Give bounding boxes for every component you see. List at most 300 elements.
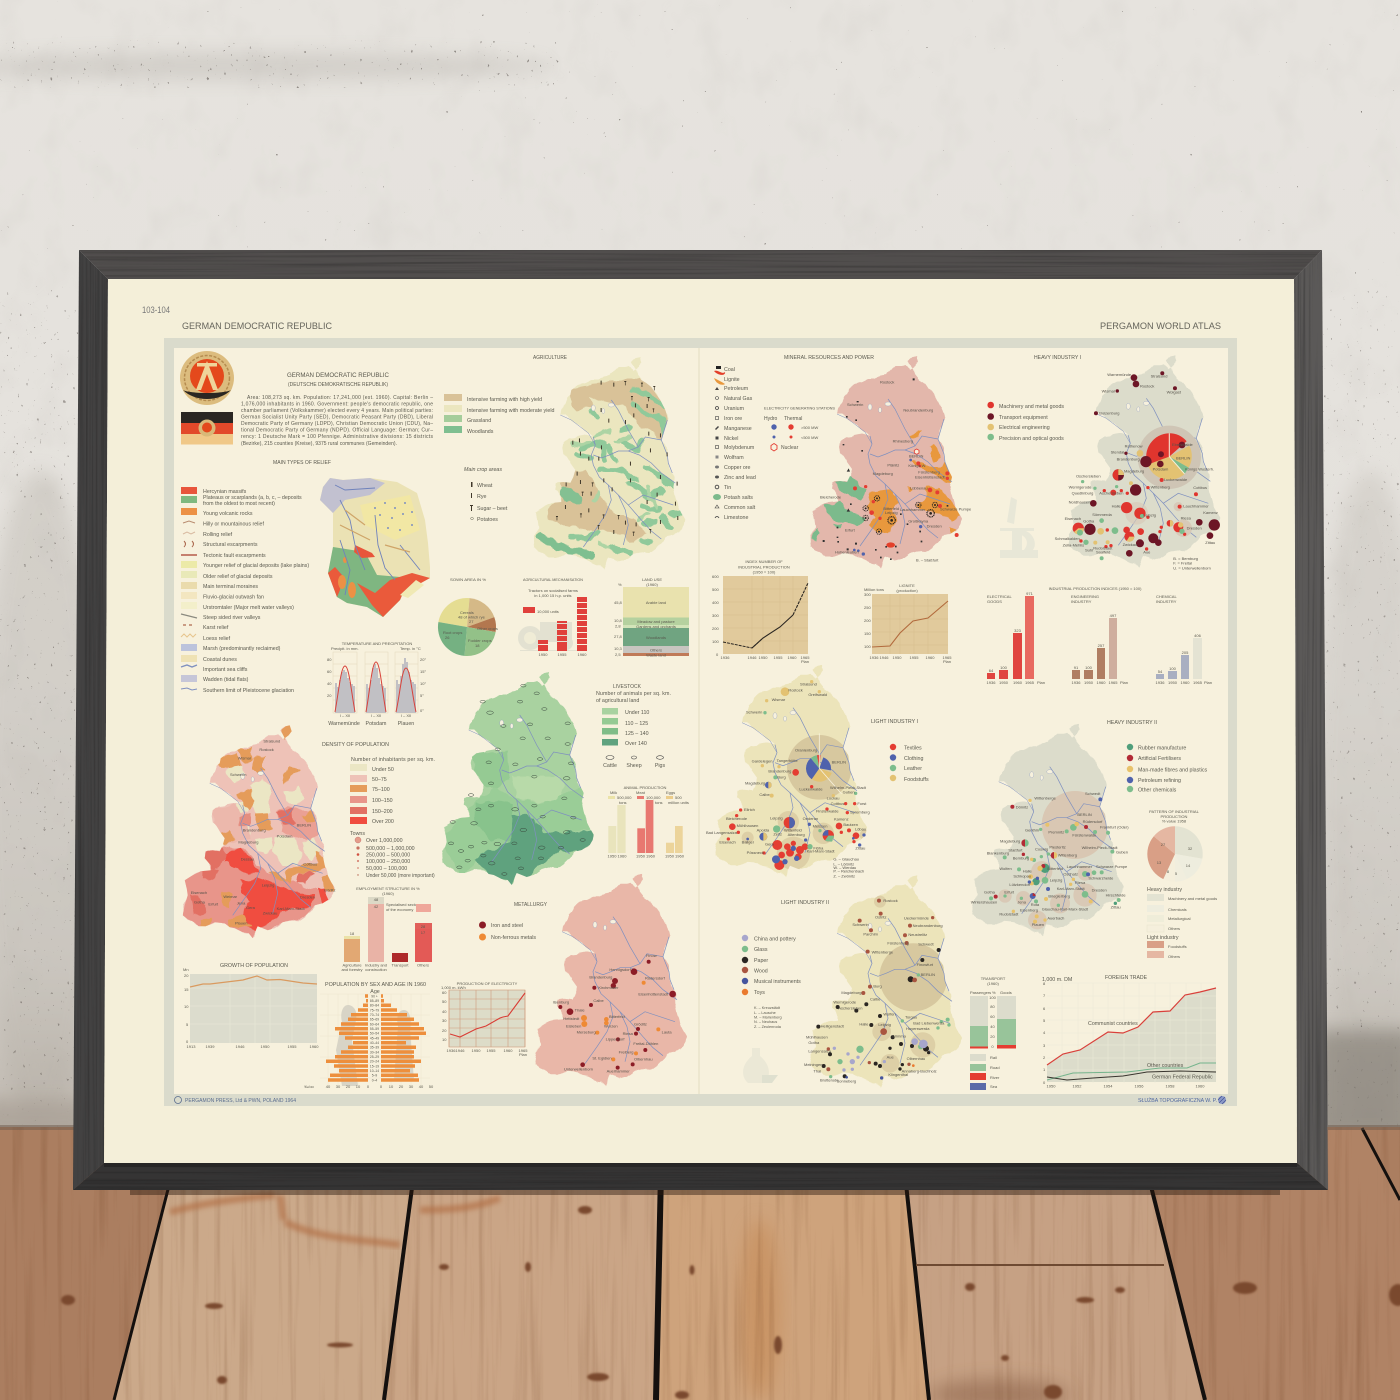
legend: animals per area: of agricultural land: [596, 698, 639, 704]
bar chart: employment: Industry and: [365, 962, 387, 968]
heading: POPULATION BY SEX AND AGE IN 1960: [325, 982, 426, 988]
bar chart: tractors: [518, 597, 587, 657]
line chart: production index: [712, 574, 810, 664]
map: light industry I: Burg: [777, 774, 786, 779]
stacked bar: land use: [614, 582, 689, 658]
legend: minerals: Tin: [724, 485, 731, 491]
icon: microscope watermark: [1000, 497, 1038, 558]
map: heavy industry II: Riesa: [1075, 880, 1086, 885]
legend: electricity generating stations: Thermal: [784, 416, 802, 422]
legend: relief types: [181, 487, 309, 694]
line chart: production index: 1960: [788, 655, 797, 660]
line chart: production index: 1965: [801, 655, 810, 660]
map: heavy industry I: Zittau: [1205, 540, 1215, 545]
map: heavy industry II: Guben: [1116, 849, 1128, 854]
legend: transport modes: River: [990, 1075, 1000, 1080]
line chart: production index: 400: [712, 600, 719, 605]
map: minerals: Bitterfeld: [883, 506, 899, 511]
map: heavy industry II: Wittenberg: [1058, 852, 1077, 857]
map: heavy industry II: Premnitz: [1048, 830, 1064, 835]
line chart: electricity: 1965: [519, 1048, 528, 1053]
line chart: electricity: 1950: [472, 1048, 481, 1053]
legend: animal icons: Sheep: [626, 763, 642, 769]
legend: animals per area: 125 – 140: [625, 731, 649, 737]
legend: relief types: Younger relief of glacial deposits (lake plains): [203, 563, 309, 569]
line chart: population: 15: [184, 987, 189, 992]
legend: electricity generating stations: [764, 406, 835, 451]
map: heavy industry I: Nordhausen: [1069, 499, 1090, 504]
panel: lignite production: [864, 583, 952, 664]
line chart: electricity: 50: [442, 999, 447, 1004]
legend: main crop areas: Rye: [477, 494, 486, 500]
bar chart: engineering industry: [1072, 613, 1128, 685]
legend: animal icons: Pigs: [655, 763, 665, 769]
map: population density: Magdeburg: [238, 839, 259, 844]
panel: animal production: [608, 785, 689, 858]
bar chart: animal production: 1950 1960: [608, 854, 627, 858]
legend: production: Eggs: [666, 790, 675, 795]
stacked bar: land use: 2,8: [615, 624, 621, 628]
labels: categories: CHEMICAL: [1156, 594, 1177, 599]
legend: minerals: Iron ore: [724, 416, 742, 422]
bar chart: tractors: 1950: [539, 652, 548, 657]
panel: main types of relief: [181, 460, 430, 694]
map: heavy industry I: Quedlinburg: [1072, 490, 1093, 495]
cream paper mat: [104, 279, 1297, 1163]
map: relief: [320, 478, 430, 617]
map: heavy industry II: Zittau: [1111, 904, 1121, 909]
subheading: Tractors on socialised farms: [528, 588, 578, 593]
chart: population pyramid: 40: [419, 1084, 424, 1089]
pie chart: industrial production: 13: [1157, 860, 1162, 865]
map: heavy industry II: Wittenberge: [1034, 796, 1057, 801]
map: heavy industry II: Schwarze Pumpe: [1096, 864, 1128, 869]
subheading: (1960): [646, 582, 658, 587]
legend: relief types: Urstromtaler (Major melt water valleys): [203, 605, 294, 611]
map: light industry I: Pössneck: [747, 850, 764, 855]
chart: population pyramid: 40–44: [370, 1041, 379, 1045]
line chart: production index: 500: [712, 587, 719, 592]
bar chart: tractors: 1955: [558, 652, 567, 657]
map: heavy industry I: Oschersleben: [1076, 474, 1101, 479]
map: light industry II: Meiningen: [804, 1062, 822, 1067]
pie chart: industrial production: 27: [1161, 842, 1166, 847]
map: population density: Görlitz: [324, 888, 336, 893]
stacked bars: transport: 40: [990, 1024, 995, 1029]
map: light industry I: Oederan: [803, 816, 818, 821]
map: population density: Brandenburg: [243, 827, 266, 832]
map: minerals: Schwerin: [847, 402, 863, 407]
labels: categories: INDUSTRY: [1071, 599, 1092, 604]
legend: light industry II: Toys: [754, 990, 765, 996]
bar chart: chemical industry: 1960: [1181, 680, 1190, 685]
station labels: Potsdam: [366, 721, 387, 727]
heading: PRODUCTION OF ELECTRICITY: [457, 981, 518, 986]
map: heavy industry I: F. = Freital: [1173, 561, 1192, 566]
pie chart: industrial production: 8: [1167, 869, 1170, 874]
legend: production: million units: [668, 800, 689, 805]
panel: temperature and precipitation: [327, 641, 426, 727]
map: light industry I: Oranienburg: [795, 748, 817, 753]
map: heavy industry I: B. = Bernburg: [1173, 556, 1198, 561]
map: light industry II: Neubrandenburg: [913, 923, 943, 928]
map: heavy industry II: Karl-Marx-Stadt: [1057, 886, 1085, 891]
text block: country facts: chamber parliament (Volkskammer) elected every 4 years. Main political parties:: [241, 408, 433, 414]
line chart: lignite: 150: [864, 631, 871, 636]
legend: relief types: Coastal dunes: [203, 657, 237, 663]
map: heavy industry I: Riesa: [1181, 515, 1192, 520]
map: heavy industry I: Leipzig: [1143, 513, 1156, 518]
map: metallurgy: Merseburg: [577, 1029, 596, 1034]
map: light industry II: Calbe: [870, 997, 881, 1002]
map: light industry I: Zeitz: [773, 832, 782, 837]
legend: animals per area: 110 – 125: [625, 721, 648, 727]
legend: towns: Under 50,000 (more important): [366, 873, 435, 879]
map: light industry I: Brandenburg: [768, 768, 791, 773]
map: population density: BERLIN: [297, 823, 311, 828]
map: heavy industry I: Warnemünde: [1107, 372, 1132, 377]
chart: climate graphs: I – XII: [401, 713, 411, 718]
legend: heavy industry: Machinery and metal goods: [1168, 896, 1217, 901]
bar chart: electrical goods: 971: [1026, 591, 1034, 596]
chart: population pyramid: 65–69: [370, 1018, 379, 1022]
legend: electricity generating stations: Hydro: [764, 416, 778, 422]
legend: minerals: Petroleum: [724, 386, 749, 392]
map: heavy industry I: Rostock: [1140, 384, 1154, 389]
bar chart: chemical industry: 406: [1194, 633, 1202, 638]
panel: density of population: [177, 723, 435, 943]
legend: density classes: Under 50: [372, 767, 394, 773]
map: metallurgy: Freiberg: [619, 1049, 634, 1054]
line chart: population: [184, 973, 319, 1049]
line chart: population: 1955: [288, 1044, 297, 1049]
bar chart: tractors: 1960: [578, 652, 587, 657]
footnotes: town abbreviations: K. – Kreuzstädt: [754, 1006, 781, 1010]
line chart: population: 10: [184, 1004, 189, 1009]
pie chart: sown area: 27: [469, 619, 474, 624]
legend: relief types: Wadden (tidal flats): [203, 677, 249, 683]
map: light industry I: Mühlhausen: [737, 823, 758, 828]
map: minerals: Schwarze Pumpe: [940, 507, 972, 512]
heading: % value 1958: [1162, 818, 1187, 824]
footnotes: town abbreviations: L. – Lausche: [754, 1011, 776, 1015]
legend: relief types: Hercynian massifs: [203, 489, 247, 495]
chart: population pyramid: 85–89: [370, 999, 379, 1003]
line chart: electricity: 1,000 m. kWh: [441, 985, 466, 990]
line chart: foreign trade: 5: [1043, 1018, 1046, 1023]
map: light industry II: Ostritz: [875, 915, 887, 920]
legend: relief types: Main terminal moraines: [203, 584, 258, 590]
map: light industry II: Sonneberg: [837, 1079, 856, 1084]
map: heavy industry II: Bernburg: [1013, 856, 1029, 861]
line chart: production index: 200: [712, 626, 719, 631]
map: heavy industry I: Aue: [1143, 549, 1151, 554]
heading: native name: (DEUTSCHE DEMOKRATISCHE REPUBLIK): [288, 382, 388, 388]
map: metallurgy: Eisleben: [566, 1024, 581, 1029]
legend: density classes: 100–150: [372, 798, 393, 804]
line chart: production index: 1946: [748, 655, 757, 660]
legend: transport modes: Sea: [990, 1084, 998, 1089]
footer: copyright: PERGAMON PRESS, Ltd & PWN, POLAND 1964: [185, 1098, 296, 1104]
map: population density: Erfurt: [208, 902, 219, 907]
map: heavy industry I: Wittenberg: [1151, 484, 1170, 489]
bar chart: engineering industry: 1950: [1084, 680, 1094, 685]
map: minerals: Lübbenau: [910, 486, 928, 491]
legend: minerals: Uranium: [724, 406, 745, 412]
map: light industry II: Aue: [887, 1054, 895, 1059]
heading: INDUSTRIAL PRODUCTION INDICES (1950 = 100): [1049, 586, 1142, 591]
line chart: electricity: 1936: [447, 1048, 456, 1053]
legend: heavy industry II: Petroleum refining: [1138, 778, 1181, 784]
heading: INDEX NUMBER OF: [745, 559, 783, 564]
line chart: population: 1913: [187, 1044, 196, 1049]
line chart: production index: 0: [716, 652, 719, 657]
legend: production: Milk: [610, 790, 617, 795]
map: light industry I: Finsterwalde: [816, 809, 839, 814]
map: minerals: Hohenleuben: [835, 549, 859, 554]
map: heavy industry II: Staßfurt: [1008, 847, 1023, 852]
chart: population pyramid: 75–79: [370, 1008, 379, 1012]
legend: production: 500,000: [617, 795, 632, 800]
heading: LIVESTOCK: [613, 684, 642, 690]
legend: light industry I: Clothing: [904, 756, 923, 762]
chart: population pyramid: 25–29: [370, 1055, 379, 1059]
map: heavy industry I: Rathenow: [1125, 443, 1143, 448]
legend: light industry I: [890, 744, 929, 783]
chart: climate graphs: 0°: [420, 708, 424, 713]
text block: country facts: (Bezirke), 215 counties (Kreise), 9375 rural communes (Gemeinden).: [241, 441, 397, 447]
map: light industry I: Luckenwalde: [799, 787, 823, 792]
map: light industry I: Karl-Marx-Stadt: [807, 849, 835, 854]
legend: heavy industry II: Artificial Fertilisers: [1138, 756, 1181, 762]
map: heavy industry II: Schwedt: [1085, 791, 1101, 796]
map: light industry I: Eisenach: [719, 839, 736, 844]
bar chart: chemical industry: 1936: [1156, 680, 1165, 685]
line chart: population: 20: [184, 973, 189, 978]
bar chart: electrical goods: 100: [1000, 665, 1008, 670]
labels: categories: ELECTRICAL: [987, 594, 1012, 599]
panel: livestock: [440, 672, 671, 890]
map: minerals: Leipzig: [885, 510, 898, 515]
map: heavy industry I: Gotha: [1083, 518, 1095, 523]
text block: country facts: [241, 395, 434, 447]
axis labels: Precipit. in mm.: [331, 646, 359, 651]
line chart: foreign trade: 6: [1043, 1006, 1046, 1011]
chart: climate graphs: 15°: [420, 669, 426, 674]
map: heavy industry I: Lauchhammer: [1183, 504, 1209, 509]
panel: foreign trade: [1042, 975, 1216, 1088]
line chart: production index: Plan: [801, 659, 809, 664]
chart: population pyramid: 10: [356, 1084, 361, 1089]
map: heavy industry II: Oschatz: [1063, 871, 1078, 876]
legend: heavy industry II: Man-made fibres and plastics: [1138, 768, 1208, 774]
map: light industry II: Thal: [813, 1069, 821, 1074]
map: heavy industry I: Zwickau: [1123, 542, 1137, 547]
legend: relief types: Southern limit of Pleistocene glaciation: [203, 688, 294, 694]
icon: vase watermark: [743, 1048, 778, 1083]
map: heavy industry II: Gotha: [984, 889, 996, 894]
map: heavy industry I: BERLIN: [1176, 455, 1190, 460]
map sheet page: [174, 348, 1228, 1094]
map: light industry II: Langensalza: [808, 1049, 832, 1054]
map: light industry I: BERLIN: [832, 760, 846, 765]
bar chart: electrical goods: 64: [989, 668, 994, 673]
legend: relief types: from the oldest to most recent): [203, 501, 275, 507]
map: minerals: Erfurt: [845, 528, 856, 533]
chart: population pyramid: 70–74: [370, 1013, 379, 1017]
legend: minerals: Potash salts: [724, 495, 753, 501]
map: minerals: Großkayna: [908, 519, 929, 524]
map: population density: Schwerin: [230, 772, 246, 777]
bar chart: employment: 17: [421, 930, 426, 935]
map: population density: Jena: [237, 901, 246, 906]
map: light industry II: Halle: [859, 1021, 869, 1026]
map: heavy industry II: Dresden: [1092, 888, 1107, 893]
legend: production: Meat: [636, 790, 646, 795]
line chart: population: 5: [186, 1022, 189, 1027]
line chart: foreign trade: 2: [1043, 1055, 1046, 1060]
map: metallurgy: Auerhammer: [607, 1069, 630, 1074]
footnotes: town abbreviations: Z. – Zeulenroda: [754, 1025, 782, 1029]
legend: light industry II: Wood: [754, 968, 768, 974]
panel: light industry II: [742, 875, 962, 1088]
map: light industry I: Gardelegen: [752, 758, 772, 763]
legend: heavy industry I: Machinery and metal goods: [999, 404, 1064, 410]
bar chart: chemical industry: 205: [1182, 650, 1189, 655]
header: German Democratic Republic: GERMAN DEMOCRATIC REPUBLIC: [182, 321, 332, 332]
map: heavy industry II: Halle: [1023, 869, 1033, 874]
bar chart: engineering industry: 1965: [1109, 680, 1118, 685]
legend: metals: Iron and steel: [491, 923, 523, 929]
pie chart: sown area: [438, 598, 498, 656]
map: minerals: Neubrandenburg: [903, 408, 933, 413]
map: minerals: Rhinesberg: [893, 439, 913, 444]
line chart: lignite: 300: [864, 592, 871, 597]
footnotes: town abbreviations: [754, 1006, 782, 1029]
map: heavy industry II: Wolfen: [999, 866, 1012, 871]
chart: population pyramid: 50: [429, 1084, 434, 1089]
station labels: [328, 721, 414, 727]
bar chart: engineering industry: Plan: [1120, 680, 1128, 685]
legend: farming types: Intensive farming with high yield: [467, 397, 542, 403]
map: heavy industry II: Plauen: [1032, 922, 1044, 927]
panel: heavy industry II: [971, 720, 1208, 937]
chart: climate graphs: [327, 652, 426, 718]
map: metallurgy: Freital-Döhlen: [633, 1041, 658, 1046]
panel: land use: [614, 577, 689, 658]
panel: sown area: [438, 577, 498, 656]
text block: country facts: Area: 108,273 sq. km. Population: 17,241,000 (est. 1960). Capital: Berlin –: [247, 395, 433, 401]
bar chart: employment: [341, 897, 432, 972]
legend: relief types: Older relief of glacial deposits: [203, 574, 273, 580]
stacked bars: transport: Passengers: [970, 990, 991, 995]
map: heavy industry I: Dresden: [1187, 525, 1202, 530]
bar chart: chemical industry: [1156, 633, 1212, 685]
map: light industry II: Parchim: [863, 932, 879, 937]
legend: light industry II: China and pottery: [754, 936, 796, 942]
centre fold: [698, 348, 700, 1094]
map: light industry II: Finowfurt: [917, 962, 934, 967]
map: heavy industry I: Schmalkalden: [1055, 536, 1080, 541]
map: heavy industry II: Lauchhammer: [1067, 864, 1093, 869]
stacked bar: land use: Woodlands: [646, 635, 666, 640]
map: light industry I: W. – Werdau: [833, 865, 856, 870]
map: metallurgy: Ilsenburg: [553, 999, 569, 1004]
map: light industry I: Rostock: [788, 688, 803, 693]
map: light industry I: Guben: [843, 789, 855, 794]
heading sub: (1960): [382, 891, 394, 896]
map: minerals: Dresden: [927, 523, 942, 528]
stacked bars: transport: 60: [990, 1014, 995, 1019]
bar chart: electrical goods: 323: [1014, 628, 1022, 633]
map: light industry I: Meissen: [813, 823, 828, 828]
map: heavy industry II: Brieglerberg: [1048, 893, 1070, 898]
legend: density classes: Number of inhabitants per sq. km.: [351, 757, 435, 763]
line chart: foreign trade: 1952: [1073, 1084, 1082, 1088]
line chart: electricity: 20: [442, 1028, 447, 1033]
stacked bars: transport: [970, 990, 1016, 1049]
legend: animals per area: Over 140: [625, 741, 647, 747]
map: light industry I: L. – Lößnitz: [833, 861, 854, 866]
legend: main crop areas: Wheat: [477, 483, 493, 489]
map: light industry I: Ellrich: [744, 807, 755, 812]
legend: light industry I: Leather: [904, 766, 922, 772]
heading: [1149, 809, 1200, 824]
map: light industry II: Leipzig: [878, 1022, 891, 1027]
legend: light industry: [1147, 935, 1187, 959]
map: population density: Karl-Marx-Stadt: [277, 906, 305, 911]
legend: density classes: 75–100: [372, 787, 390, 793]
map: minerals: BERLIN: [909, 454, 924, 459]
heading: METALLURGY: [514, 902, 548, 908]
legend: minerals: [713, 366, 756, 521]
line chart: lignite: 1955: [910, 655, 919, 660]
legend: animals per area: [596, 691, 671, 747]
map: light industry II: Bad Liebenwerda: [913, 1020, 945, 1025]
legend: farming types: Woodlands: [467, 429, 494, 435]
map: population density: Dresden: [300, 895, 315, 900]
map: population density: Cottbus: [303, 861, 317, 866]
stacked bar: land use: 10,8: [614, 618, 623, 623]
map: population density: Plauen: [235, 921, 247, 926]
subheading line 2: in 1,000 15 h.p. units: [534, 593, 572, 598]
legend: minerals: Nickel: [724, 436, 738, 442]
legend: minerals: Coal: [724, 367, 735, 373]
panel: transport: [970, 976, 1016, 1090]
line chart: foreign trade: 3: [1043, 1043, 1046, 1048]
map: light industry II: [804, 875, 962, 1088]
heading: TRANSPORT: [981, 976, 1006, 981]
legend: socialised sector: [386, 902, 431, 912]
legend: minerals: Lignite: [724, 377, 740, 383]
map: light industry I: Zittau: [855, 845, 865, 850]
chart: population pyramid: 0–4: [372, 1078, 377, 1082]
panel: index of industrial production: [712, 559, 810, 664]
map: light industry I: Bad Langensalza: [706, 830, 738, 835]
pie chart: industrial production: 14: [1186, 863, 1191, 868]
stacked bar: land use: %: [618, 582, 622, 587]
map: population density: Zwickau: [263, 910, 277, 915]
chart: population pyramid: 55–59: [370, 1027, 379, 1031]
legend: relief types: Rolling relief: [203, 532, 233, 538]
map: population density: Weimar: [223, 894, 238, 899]
axis label: temperature: Temp. in °C: [400, 646, 421, 651]
map: heavy industry I: Magdeburg: [1124, 469, 1144, 474]
legend: minerals: Limestone: [724, 515, 748, 521]
map: minerals: Eisenhüttenstadt: [915, 474, 946, 479]
bar chart: employment: 18: [350, 931, 355, 936]
legend: production: 500: [675, 795, 682, 800]
